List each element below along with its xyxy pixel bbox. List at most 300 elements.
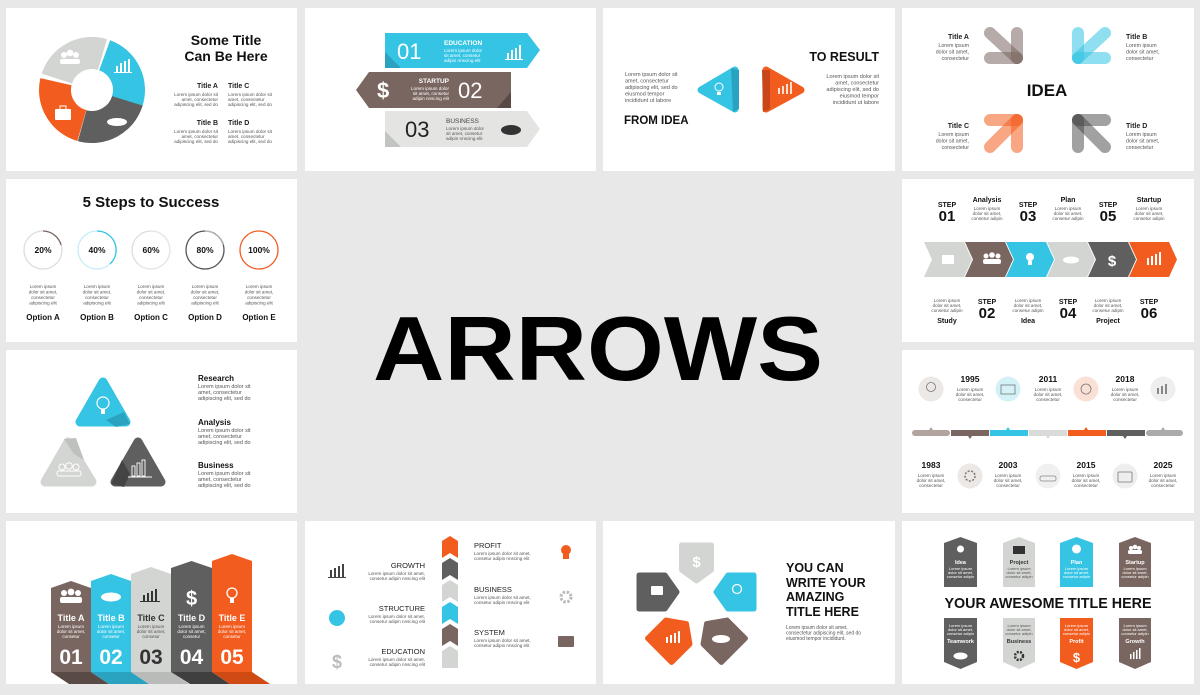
- panel: timeline: consectetur: [958, 397, 982, 402]
- top steps: 05: [1100, 208, 1116, 225]
- labels: adipiscing elit, sed do: [198, 440, 251, 446]
- column C: dolor sit amet,: [137, 629, 165, 634]
- text blocks A-D: amet, consectetur: [181, 97, 218, 102]
- panel: 5 steps to success: 80%: [196, 245, 214, 255]
- column C: 03: [139, 646, 163, 669]
- text right: incididunt ut labore: [833, 100, 879, 106]
- column D: Title D: [178, 613, 206, 623]
- descriptions: adipiscing elit: [29, 300, 58, 306]
- bottom tags: Teamwork: [947, 639, 975, 645]
- panel: timeline: dolor sit amet,: [956, 392, 984, 397]
- top tags: Lorem ipsum: [1123, 566, 1147, 571]
- orange triangle: [762, 70, 801, 112]
- bottom tags: consetur adipin: [1063, 631, 1090, 636]
- descriptions: adipiscing elit: [191, 300, 220, 306]
- text left: [625, 72, 678, 104]
- labels: Lorem ipsum: [1126, 43, 1157, 49]
- column B: [91, 574, 131, 672]
- panel: timeline: Lorem ipsum: [918, 473, 944, 478]
- ribbon 01 education: 01: [397, 39, 421, 64]
- left labels: consetur adipin nnscing elit: [370, 619, 426, 624]
- icons in donut: [55, 50, 132, 126]
- bottom steps: Lorem ipsum: [1015, 298, 1041, 303]
- panel: triangle arrows: [6, 350, 297, 513]
- column C: consetur: [142, 634, 160, 639]
- bottom steps: Lorem ipsum: [934, 298, 960, 303]
- descriptions: Lorem ipsum: [84, 284, 110, 289]
- panel: 5 steps to success: 40%: [88, 245, 106, 255]
- column B: Title B: [97, 613, 125, 623]
- panel: 6 step process: dolor sit amet,: [1054, 211, 1082, 216]
- labels: Lorem ipsum dolor sit: [198, 471, 251, 477]
- panel: 6 step process: 04: [1060, 305, 1077, 322]
- bottom tags: Growth: [1125, 639, 1145, 645]
- column C: Title C: [137, 613, 165, 623]
- headline: YOU CAN: [786, 561, 844, 575]
- column E: dolor sit amet,: [218, 629, 246, 634]
- panel: timeline: dolor sit amet,: [917, 478, 945, 483]
- right labels: consetur adipin nnscing elit: [474, 643, 530, 648]
- top steps: Analysis: [973, 197, 1002, 204]
- panel: timeline: Lorem ipsum: [1073, 473, 1099, 478]
- option labels: Option C: [134, 313, 168, 322]
- panel: 6 step process: Project: [1096, 318, 1121, 325]
- labels: Analysis: [198, 418, 231, 427]
- top tags: dolor sit amet,: [948, 570, 973, 575]
- text blocks A-D: Title A: [197, 83, 218, 90]
- title: YOUR AWESOME TITLE HERE: [944, 595, 1152, 612]
- ribbon 01 education: [385, 33, 540, 68]
- ribbon 01 education: EDUCATION: [444, 40, 482, 47]
- top tags: [944, 537, 1151, 587]
- panel: timeline: consectetur: [1113, 397, 1137, 402]
- column B: 02: [99, 646, 123, 669]
- panel: 6 step process: consetur adipin: [971, 216, 1003, 221]
- arrow C orange: [990, 120, 1017, 147]
- descriptions: dolor sit amet,: [191, 290, 219, 294]
- bottom tags: Lorem ipsum: [1123, 623, 1147, 628]
- ribbon 02 startup: $: [377, 78, 389, 103]
- left labels: Lorem ipsum dolor sit amet,: [368, 614, 425, 619]
- column E: [212, 554, 252, 672]
- right labels: PROFIT: [474, 541, 502, 550]
- text right: eiusmod tempor: [840, 94, 879, 100]
- labels: consectetur: [942, 56, 969, 62]
- ribbon 01 education: sit amet, consetur: [444, 53, 481, 58]
- option labels: Option A: [26, 313, 60, 322]
- panel: timeline: dolor sit amet,: [994, 478, 1022, 483]
- panel: 6 step process: STEP: [978, 299, 996, 306]
- labels: Lorem ipsum: [1126, 132, 1157, 138]
- text blocks A-D: [174, 83, 273, 144]
- column C: [131, 567, 171, 672]
- left icons: [328, 564, 346, 672]
- ribbon 02 startup: STARTUP: [419, 78, 450, 85]
- top tags: Project: [1010, 560, 1028, 566]
- descriptions: dolor sit amet,: [83, 290, 111, 294]
- top steps: 01: [939, 208, 955, 225]
- left labels: Lorem ipsum dolor sit amet,: [368, 571, 425, 576]
- panel: 6 step process: Idea: [1021, 318, 1035, 325]
- panel: 6 step process: dolor sit amet,: [1135, 211, 1163, 216]
- top steps: 03: [1020, 208, 1036, 225]
- top steps: STEP: [1099, 202, 1117, 209]
- heading from idea: FROM IDEA: [624, 115, 689, 127]
- panel: 6 step process: 06: [1141, 305, 1157, 322]
- right labels: [474, 541, 531, 648]
- column A: 01: [59, 646, 83, 669]
- panel: 5 steps to success: 20%: [34, 245, 52, 255]
- chevron band: $: [1108, 253, 1117, 270]
- right labels: consetur adipin nnscing elit: [474, 600, 530, 605]
- descriptions: adipiscing elit: [137, 300, 166, 306]
- ribbon 01 education: Lorem ipsum dolor: [444, 48, 483, 53]
- descriptions: [29, 284, 274, 306]
- column B: dolor sit amet,: [97, 629, 125, 634]
- body text: consectetur adipiscing elit, sed do: [786, 630, 861, 636]
- top tags: consetur adipin: [1005, 574, 1033, 579]
- panel: timeline: consectetur: [919, 483, 943, 488]
- panel: 6 step process: Lorem ipsum: [1055, 206, 1081, 211]
- column A: [51, 581, 91, 672]
- top tags: dolor sit amet,: [1122, 570, 1148, 575]
- ribbon 03 business: adipin nnscing elit: [446, 136, 483, 141]
- descriptions: dolor sit amet,: [137, 290, 165, 294]
- descriptions: Lorem ipsum: [246, 284, 272, 289]
- heading to result: TO RESULT: [809, 50, 879, 64]
- labels: [198, 374, 251, 489]
- labels: dolor sit amet,: [936, 138, 969, 144]
- chevron band: [924, 242, 1177, 277]
- left labels: [368, 561, 426, 667]
- labels: consectetur: [1126, 145, 1154, 151]
- column A: consetur: [62, 634, 80, 639]
- panel: 6 step process: STEP: [1140, 299, 1158, 306]
- ribbon 03 business: 03: [405, 117, 429, 142]
- labels: Business: [198, 461, 234, 470]
- column E: Lorem ipsum: [219, 624, 245, 629]
- panel: from idea to result: [603, 8, 895, 171]
- top tags: consetur adipin: [1063, 574, 1090, 579]
- body text: eiusmod tempor incididunt.: [786, 636, 846, 642]
- left labels: Lorem ipsum dolor sit amet,: [368, 657, 425, 662]
- headline: WRITE YOUR: [786, 576, 866, 590]
- labels: adipiscing elit, sed do: [198, 396, 251, 402]
- panel: idea arrows: [902, 8, 1194, 171]
- ribbon 02 startup: Lorem ipsum dolor: [411, 86, 449, 91]
- bottom steps: Lorem ipsum: [1095, 298, 1121, 303]
- gray triangle: [45, 438, 92, 482]
- bottom steps: consetur adipin: [1012, 308, 1044, 313]
- ribbon 02 startup: adipin nnscing elit: [412, 96, 450, 101]
- column E: Title E: [219, 613, 245, 623]
- descriptions: Lorem ipsum: [138, 284, 164, 289]
- labels: adipiscing elit, sed do: [198, 483, 251, 489]
- ribbon 02 startup: [356, 72, 511, 108]
- panel: 6 step process: Study: [937, 318, 957, 325]
- labels: Lorem ipsum: [938, 43, 970, 49]
- bottom tags: dolor sit amet,: [1006, 627, 1032, 632]
- bottom steps: consetur adipin: [1092, 308, 1124, 313]
- panel: timeline: [902, 350, 1194, 513]
- text left: adipiscing elit, sed do: [625, 85, 678, 91]
- option labels: Option E: [242, 313, 276, 322]
- labels: dolor sit amet,: [936, 50, 969, 56]
- chevron column: [442, 536, 458, 668]
- labels: [936, 34, 1159, 151]
- top steps: Plan: [1061, 197, 1075, 204]
- top tags: Lorem ipsum: [1065, 566, 1089, 571]
- column A: dolor sit amet,: [57, 629, 85, 634]
- panel: timeline: dolor sit amet,: [1111, 392, 1139, 397]
- panel: timeline: Lorem ipsum: [1035, 387, 1061, 392]
- panel: 6 step process: consetur adipin: [1133, 216, 1165, 221]
- column E: 05: [220, 646, 244, 669]
- top tags: Lorem ipsum: [949, 566, 973, 571]
- labels: amet, consectetur: [198, 390, 242, 396]
- descriptions: adipiscing elit: [83, 300, 112, 306]
- text blocks A-D: adipiscing elit, sed do: [174, 139, 218, 144]
- title: 5 Steps to Success: [83, 194, 219, 211]
- panel: 6 step process: 02: [979, 305, 995, 322]
- bottom icons: [958, 464, 1138, 488]
- column B: Lorem ipsum: [98, 624, 124, 629]
- panel: timeline: Lorem ipsum: [1150, 473, 1176, 478]
- bottom tags: [944, 618, 1151, 669]
- headline: AMAZING: [786, 590, 844, 604]
- descriptions: dolor sit amet,: [245, 290, 273, 294]
- left labels: STRUCTURE: [379, 604, 425, 613]
- headline: [786, 561, 866, 619]
- text left: amet, consectetur: [625, 78, 669, 84]
- bottom years: [922, 460, 1173, 470]
- top steps: STEP: [938, 202, 956, 209]
- panel: 5 steps to success: [6, 179, 297, 342]
- bottom years: 2025: [1154, 460, 1173, 470]
- column D: dolor sit amet,: [177, 629, 206, 634]
- bottom tags: consetur adipin: [1005, 631, 1033, 636]
- panel: timeline: dolor sit amet,: [1072, 478, 1100, 483]
- donut arrow cycle: [45, 43, 139, 137]
- panel: timeline: consectetur: [1036, 397, 1060, 402]
- panel: timeline: consectetur: [1151, 483, 1175, 488]
- column A: Lorem ipsum: [58, 624, 84, 629]
- bottom tags: Lorem ipsum: [949, 623, 973, 628]
- column D: $: [186, 588, 197, 610]
- arrow D gray: [1078, 120, 1105, 147]
- text right: Lorem ipsum dolor sit: [826, 74, 879, 80]
- panel: timeline: consectetur: [1074, 483, 1098, 488]
- text blocks A-D: Lorem ipsum dolor sit: [228, 129, 273, 134]
- text left: eiusmod tempor: [625, 92, 665, 98]
- panel: 6 step process: Lorem ipsum: [974, 206, 1000, 211]
- ribbon 02 startup: sit amet, consetur: [413, 91, 449, 96]
- top years: [961, 374, 1135, 384]
- panel: 6 step process: consetur adipin: [1052, 216, 1084, 221]
- bottom tags: dolor sit amet,: [948, 627, 973, 632]
- descriptions: consectetur: [85, 295, 109, 300]
- labels: amet, consectetur: [198, 477, 242, 483]
- bottom tags: $: [1073, 650, 1081, 665]
- text left: Lorem ipsum dolor sit: [625, 72, 678, 78]
- panel: circular cycle with title: [6, 8, 297, 171]
- top tags: Plan: [1071, 560, 1083, 566]
- labels: dolor sit amet,: [1126, 50, 1159, 56]
- labels: Lorem ipsum dolor sit: [198, 428, 251, 434]
- panel: 6 step process: STEP: [1059, 299, 1077, 306]
- cyan triangle: [80, 382, 130, 427]
- text left: incididunt ut labore: [625, 98, 671, 104]
- top tags: consetur adipin: [947, 574, 974, 579]
- descriptions: consectetur: [247, 295, 271, 300]
- fold shadows: [51, 672, 270, 684]
- labels: dolor sit amet,: [1126, 138, 1159, 144]
- bottom years: 1983: [922, 460, 941, 470]
- bottom steps: dolor sit amet,: [1094, 303, 1122, 308]
- left labels: consetur adipin nnscing elit: [370, 576, 426, 581]
- ribbon 03 business: sit amet, consetur: [446, 131, 483, 136]
- top tags: dolor sit amet,: [1006, 570, 1032, 575]
- title: Some Title: [191, 32, 261, 48]
- top steps: STEP: [1019, 202, 1037, 209]
- text blocks A-D: Lorem ipsum dolor sit: [174, 129, 219, 134]
- title: [184, 32, 268, 64]
- ribbon 03 business: BUSINESS: [446, 118, 480, 125]
- bottom tags: dolor sit amet,: [1122, 627, 1148, 632]
- option labels: [26, 313, 276, 322]
- panel: timeline: dolor sit amet,: [1149, 478, 1177, 483]
- right labels: SYSTEM: [474, 628, 505, 637]
- right labels: BUSINESS: [474, 585, 512, 594]
- panel: tag cards with title: [902, 521, 1194, 684]
- text right: amet, consectetur: [835, 80, 879, 86]
- right labels: Lorem ipsum dolor sit amet,: [474, 638, 531, 643]
- panel: 5 steps to success: 100%: [248, 245, 270, 255]
- ribbon 01 education: adipin nnscing elit: [444, 58, 481, 63]
- panel: ribbon list: [305, 8, 596, 171]
- panel: pentagon cluster with title: [603, 521, 895, 684]
- descriptions: Lorem ipsum: [30, 284, 56, 289]
- text blocks A-D: amet, consectetur: [228, 134, 265, 139]
- left labels: consetur adipin nnscing elit: [370, 662, 426, 667]
- descriptions: adipiscing elit: [245, 300, 274, 306]
- panel: five up arrows: [6, 521, 297, 684]
- progress circles: [24, 231, 278, 269]
- right icons: [558, 545, 574, 647]
- body text: Lorem ipsum dolor sit amet,: [786, 625, 848, 631]
- labels: consectetur: [1126, 56, 1154, 62]
- panel: 6 step process: Lorem ipsum: [1136, 206, 1162, 211]
- ribbon 03 business: Lorem ipsum dolor: [446, 126, 485, 131]
- bottom steps: [931, 298, 1124, 313]
- labels: consectetur: [942, 145, 969, 151]
- panel: timeline: Lorem ipsum: [957, 387, 983, 392]
- option labels: Option B: [80, 313, 114, 322]
- bottom tags: Business: [1007, 639, 1031, 645]
- column D: consetur: [183, 634, 201, 639]
- right labels: Lorem ipsum dolor sit amet,: [474, 551, 531, 556]
- body text: [786, 625, 861, 642]
- top tags: consetur adipin: [1121, 574, 1149, 579]
- pentagon cluster: $: [692, 554, 701, 571]
- descriptions: consectetur: [193, 295, 217, 300]
- top tags: Startup: [1125, 560, 1145, 566]
- left icons: $: [332, 652, 342, 672]
- ribbon 03 business: [385, 111, 540, 147]
- panel: 5 steps to success: 60%: [142, 245, 160, 255]
- option labels: Option D: [188, 313, 222, 322]
- column D: Lorem ipsum: [178, 624, 205, 629]
- text blocks A-D: Lorem ipsum dolor sit: [228, 92, 273, 97]
- text blocks A-D: Title B: [197, 120, 218, 127]
- text blocks A-D: Title C: [228, 83, 249, 90]
- bottom tags: Profit: [1069, 639, 1084, 645]
- dark triangle: [111, 442, 161, 487]
- text right: adipiscing elit, sed do: [826, 87, 879, 93]
- text blocks A-D: adipiscing elit, sed do: [228, 139, 272, 144]
- text blocks A-D: amet, consectetur: [228, 97, 265, 102]
- bottom steps: dolor sit amet,: [1014, 303, 1042, 308]
- left labels: EDUCATION: [381, 647, 425, 656]
- top tags: dolor sit amet,: [1064, 570, 1089, 575]
- column C: Lorem ipsum: [138, 624, 164, 629]
- bottom tags: consetur adipin: [1121, 631, 1149, 636]
- labels: Title B: [1126, 34, 1147, 41]
- title: Can Be Here: [184, 48, 268, 64]
- arrow A brown: [990, 33, 1017, 58]
- column B: consetur: [102, 634, 120, 639]
- descriptions: dolor sit amet,: [29, 290, 57, 294]
- panel: 6 step process: [902, 179, 1194, 342]
- top years: 2018: [1116, 374, 1135, 384]
- labels: amet, consectetur: [198, 434, 242, 440]
- bottom steps: dolor sit amet,: [933, 303, 961, 308]
- text right: [826, 74, 879, 106]
- descriptions: Lorem ipsum: [192, 284, 218, 289]
- pentagon cluster: [639, 545, 754, 662]
- labels: Title C: [948, 123, 969, 130]
- top years: 1995: [961, 374, 980, 384]
- panel: timeline: Lorem ipsum: [995, 473, 1021, 478]
- descriptions: consectetur: [31, 295, 55, 300]
- panel: 6 step process: dolor sit amet,: [973, 211, 1001, 216]
- right labels: consetur adipin nnscing elit: [474, 556, 530, 561]
- labels: Lorem ipsum: [938, 132, 970, 138]
- headline: TITLE HERE: [786, 605, 859, 619]
- panel: timeline: consectetur: [996, 483, 1020, 488]
- column A: Title A: [57, 613, 85, 623]
- labels: Title A: [948, 34, 969, 41]
- panel: vertical chevron column: [305, 521, 596, 684]
- arrow B cyan: [1078, 33, 1105, 58]
- column D: 04: [180, 646, 203, 669]
- panel: timeline: Lorem ipsum: [1112, 387, 1138, 392]
- top years: 2011: [1039, 374, 1057, 384]
- bottom steps: consetur adipin: [931, 308, 963, 313]
- cyan triangle: [701, 68, 739, 112]
- top steps: [938, 197, 1161, 225]
- labels: Research: [198, 374, 234, 383]
- top tags: Lorem ipsum: [1007, 566, 1031, 571]
- center heading: IDEA: [1027, 81, 1067, 100]
- bottom years: 2003: [999, 460, 1018, 470]
- bottom tags: Lorem ipsum: [1065, 623, 1089, 628]
- bottom years: 2015: [1077, 460, 1096, 470]
- bottom tags: Lorem ipsum: [1007, 623, 1031, 628]
- left labels: GROWTH: [391, 561, 425, 570]
- text blocks A-D: amet, consectetur: [181, 134, 218, 139]
- text blocks A-D: Title D: [228, 120, 249, 127]
